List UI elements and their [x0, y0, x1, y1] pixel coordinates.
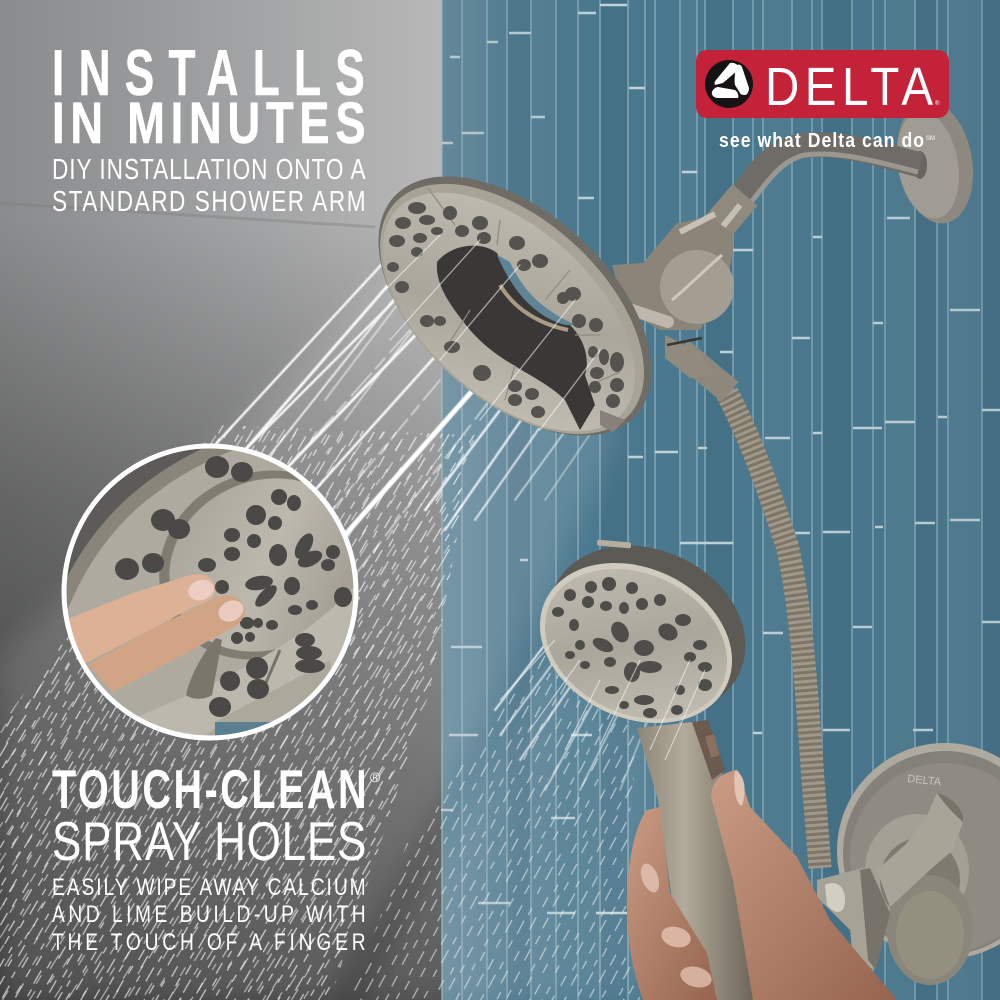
heading: installs in minutes: INSTALLS [52, 37, 365, 109]
water streams from main head [205, 235, 610, 640]
heading: installs in minutes: IN MINUTES [52, 92, 366, 156]
hand gripping hand shower [627, 770, 897, 1000]
text: touch-clean description [52, 873, 366, 956]
logo: Delta: ® [935, 100, 940, 107]
background: blue glass tile wall [441, 0, 1000, 1000]
logo: Delta [696, 50, 949, 118]
water streams from hand shower [495, 625, 650, 790]
heading: touch-clean spray holes: SPRAY HOLES [52, 810, 366, 872]
diverter mount [612, 214, 734, 392]
heading: installs in minutes [52, 37, 366, 156]
logo: Delta: DELTA [765, 56, 933, 117]
text: DIY installation: DIY INSTALLATION ONTO A [52, 152, 366, 186]
wall valve trim plate [837, 743, 1000, 985]
text: DIY installation: STANDARD SHOWER ARM [52, 184, 366, 218]
wall valve spout and lever [817, 793, 963, 970]
text: DIY installation [52, 152, 366, 218]
hand shower spray holes [552, 577, 712, 718]
text: touch-clean description: EASILY WIPE AWAY CALCIUM [52, 873, 366, 901]
callout circle: touch-clean close-up [62, 444, 358, 740]
heading: touch-clean spray holes: TOUCH-CLEAN [52, 760, 367, 821]
text: touch-clean description: THE TOUCH OF A FINGER [52, 928, 366, 956]
ring hole [437, 246, 595, 430]
wall flange [888, 95, 982, 229]
heading: touch-clean spray holes: ® [370, 769, 381, 785]
logo tagline: SM [926, 136, 935, 142]
wall valve trim plate: DELTA [907, 773, 942, 789]
main head spray holes [387, 202, 624, 418]
streams over ring head [385, 235, 600, 430]
hand shower back [521, 514, 773, 746]
text: touch-clean description: AND LIME BUILD-UP WITH [52, 900, 366, 928]
shower arm [715, 145, 920, 230]
main ring shower head [331, 127, 699, 485]
close-up lever [186, 638, 222, 699]
hand shower handle [637, 720, 755, 1000]
heading: touch-clean spray holes [52, 760, 381, 872]
logo tagline: see what Delta can do [719, 129, 924, 151]
hand shower face with holes [500, 533, 758, 760]
water specks from main head [0, 425, 475, 1000]
spray mist [0, 260, 660, 1000]
water specks from hand shower [350, 650, 640, 1000]
close-up spray nozzles [115, 456, 352, 717]
background: gray wall [0, 0, 445, 1000]
flexible hose [727, 393, 820, 868]
close-up fingers [60, 574, 247, 692]
